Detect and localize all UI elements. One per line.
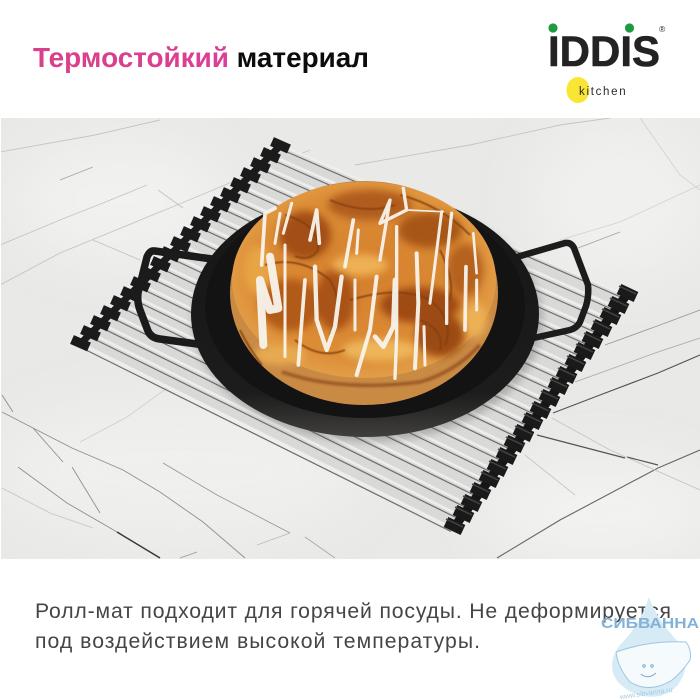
kitchen label: kitchen [579, 86, 627, 98]
yellow spot [566, 77, 590, 103]
cake top [232, 182, 496, 378]
right pan handle [510, 243, 588, 342]
photo: marble counter with pan on roll mat [0, 118, 700, 560]
description line 2: под воздействием высокой температуры. [35, 630, 480, 653]
roll mat [72, 142, 636, 532]
cake side [230, 181, 498, 405]
description line 1: Ролл-мат подходит для горячей посуды. Не деформируется [35, 600, 671, 623]
logo wordmark: IDDIS [548, 28, 660, 76]
mat shadow area [80, 145, 625, 528]
marble surface [0, 118, 700, 560]
mat left rubber strip [72, 142, 289, 347]
marble veins [0, 118, 700, 558]
watermark: Sibvanna [601, 597, 700, 700]
watermark name: СИБВАННА [601, 616, 700, 632]
cake fold lines [240, 195, 470, 365]
logo dots [548, 23, 634, 33]
watermark drop [612, 597, 686, 697]
cake browning [240, 190, 487, 385]
registered mark: ® [659, 24, 666, 34]
cake [230, 181, 498, 405]
description text [35, 600, 671, 653]
mat right rubber strip [446, 286, 636, 530]
pan body [191, 191, 539, 437]
watermark tub [616, 642, 690, 688]
title: Термостойкий материал [33, 42, 369, 73]
left pan handle [138, 251, 212, 346]
logo: IDDIS kitchen [548, 23, 666, 103]
watermark face [641, 665, 656, 677]
pan shadow [190, 232, 546, 446]
mat rods [79, 145, 625, 532]
cake crust band [282, 345, 480, 385]
icing drizzle [260, 188, 477, 378]
